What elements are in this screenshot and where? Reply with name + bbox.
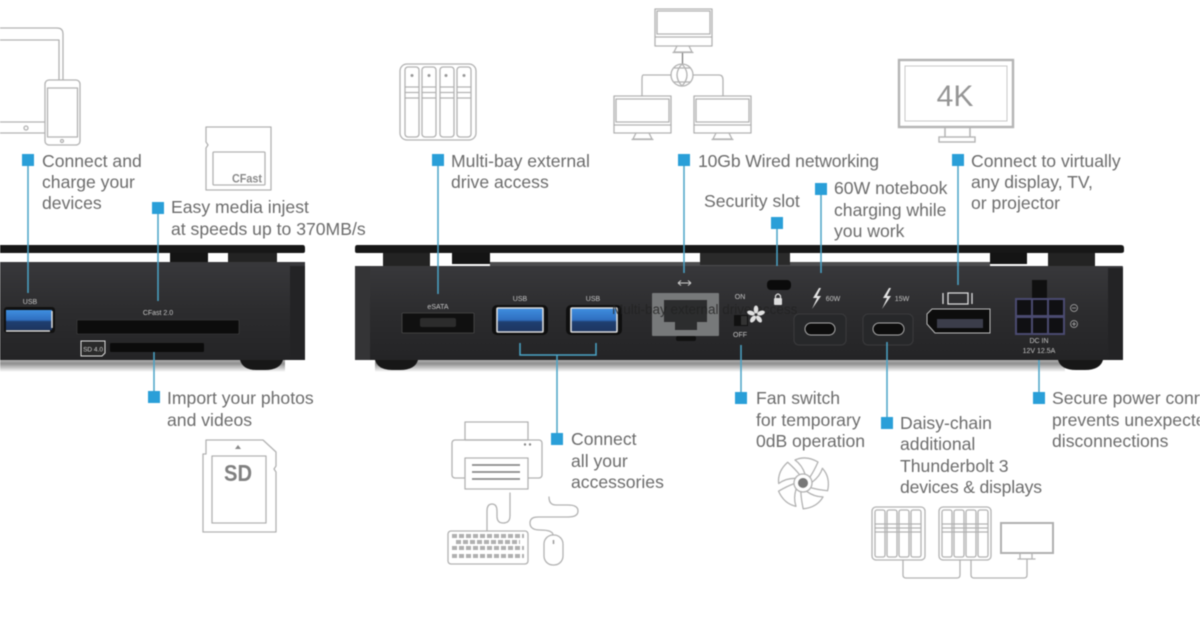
callout: connect and charge: Connect and — [42, 151, 142, 171]
icon: 4K display: 4K — [937, 80, 973, 113]
CFast slot: CFast 2.0 — [143, 310, 173, 317]
CFast slot — [77, 310, 239, 334]
callout: daisy chain: additional — [900, 434, 975, 454]
callout: security slot — [704, 191, 800, 266]
callout: media ingest — [152, 197, 366, 301]
icon: daisy chain devices — [872, 507, 1053, 578]
callout: display — [952, 151, 1121, 285]
callout: notebook charging: 60W notebook — [834, 178, 948, 198]
fan glyph — [746, 306, 766, 324]
callout: notebook charging: charging while — [834, 200, 946, 220]
icon: multi-bay drive — [400, 64, 476, 140]
USB port left: USB — [23, 299, 38, 306]
callout: networking — [678, 151, 879, 273]
callout: import photos — [148, 352, 314, 430]
callout: connect and charge — [22, 151, 142, 293]
eSATA port: eSATA — [427, 304, 449, 311]
callout: daisy chain: Daisy-chain — [900, 413, 992, 433]
icon: tablet and phone — [0, 28, 80, 145]
USB port left — [4, 299, 55, 333]
icon: fan — [776, 458, 831, 512]
icon: CFast card: CFast — [232, 172, 262, 186]
callout: import photos: and videos — [167, 410, 252, 430]
DisplayPort — [927, 293, 990, 333]
callout: fan switch: Fan switch — [756, 388, 840, 408]
callout: display: any display, TV, — [971, 172, 1093, 192]
Thunderbolt port 15W — [863, 288, 913, 345]
callout: accessories: all your — [571, 451, 628, 471]
callout: connect and charge: charge your — [42, 172, 135, 192]
icon: SD card — [203, 440, 276, 532]
power connector: DC IN — [1029, 338, 1049, 345]
callout: display: Connect to virtually — [971, 151, 1121, 171]
fan switch: OFF — [733, 332, 747, 339]
Thunderbolt port 15W: 15W — [895, 296, 910, 303]
callout: notebook charging — [815, 178, 948, 273]
callout: fan switch: for temporary — [756, 410, 861, 430]
callout: fan switch: 0dB operation — [756, 431, 865, 451]
eSATA port — [402, 304, 474, 333]
USB port 1: USB — [513, 296, 528, 303]
overlay stray text: Multi-bay external drive access — [612, 302, 798, 317]
callout: daisy chain: Thunderbolt 3 — [900, 456, 1009, 476]
callout: import photos: Import your photos — [167, 388, 314, 408]
callout: accessories — [520, 343, 664, 492]
SD slot: SD 4.0 — [83, 346, 103, 354]
callout: daisy chain — [881, 342, 1042, 497]
icon: printer keyboard mouse — [448, 422, 578, 565]
left dock device — [0, 245, 305, 372]
icon: SD card: SD — [224, 460, 252, 486]
fan switch: ON — [735, 294, 745, 301]
callout: networking: 10Gb Wired networking — [698, 151, 879, 171]
callout: power: disconnections — [1052, 431, 1169, 451]
callout: accessories: accessories — [571, 472, 664, 492]
callout: fan switch — [735, 345, 865, 451]
security slot — [767, 280, 791, 305]
Thunderbolt port 60W — [794, 288, 846, 345]
callout: connect and charge: devices — [42, 193, 102, 213]
power connector — [1015, 280, 1078, 355]
USB port 2: USB — [586, 296, 601, 303]
USB port 2 — [566, 296, 622, 335]
callout: accessories: Connect — [571, 429, 637, 449]
ethernet port — [652, 280, 719, 341]
callout: daisy chain: devices & displays — [900, 477, 1042, 497]
callout: notebook charging: you work — [834, 221, 905, 241]
right dock device — [355, 245, 1124, 372]
callout: multi-bay: Multi-bay external — [451, 151, 590, 171]
callout: security slot: Security slot — [704, 191, 800, 211]
power connector: 12V 12.5A — [1023, 348, 1056, 355]
Thunderbolt port 60W: 60W — [826, 296, 841, 303]
callout: multi-bay — [432, 151, 590, 294]
USB port 1 — [492, 296, 548, 335]
callout: display: or projector — [971, 193, 1060, 213]
SD slot — [81, 341, 204, 356]
callout: multi-bay: drive access — [451, 172, 549, 192]
icon: CFast card — [206, 127, 271, 190]
callout: media ingest: at speeds up to 370MB/s — [171, 219, 366, 239]
callout: media ingest: Easy media injest — [171, 197, 309, 217]
fan switch — [733, 294, 748, 339]
callout: power — [1033, 360, 1200, 451]
icon: 4K display — [899, 60, 1013, 142]
icon: network — [614, 9, 751, 140]
